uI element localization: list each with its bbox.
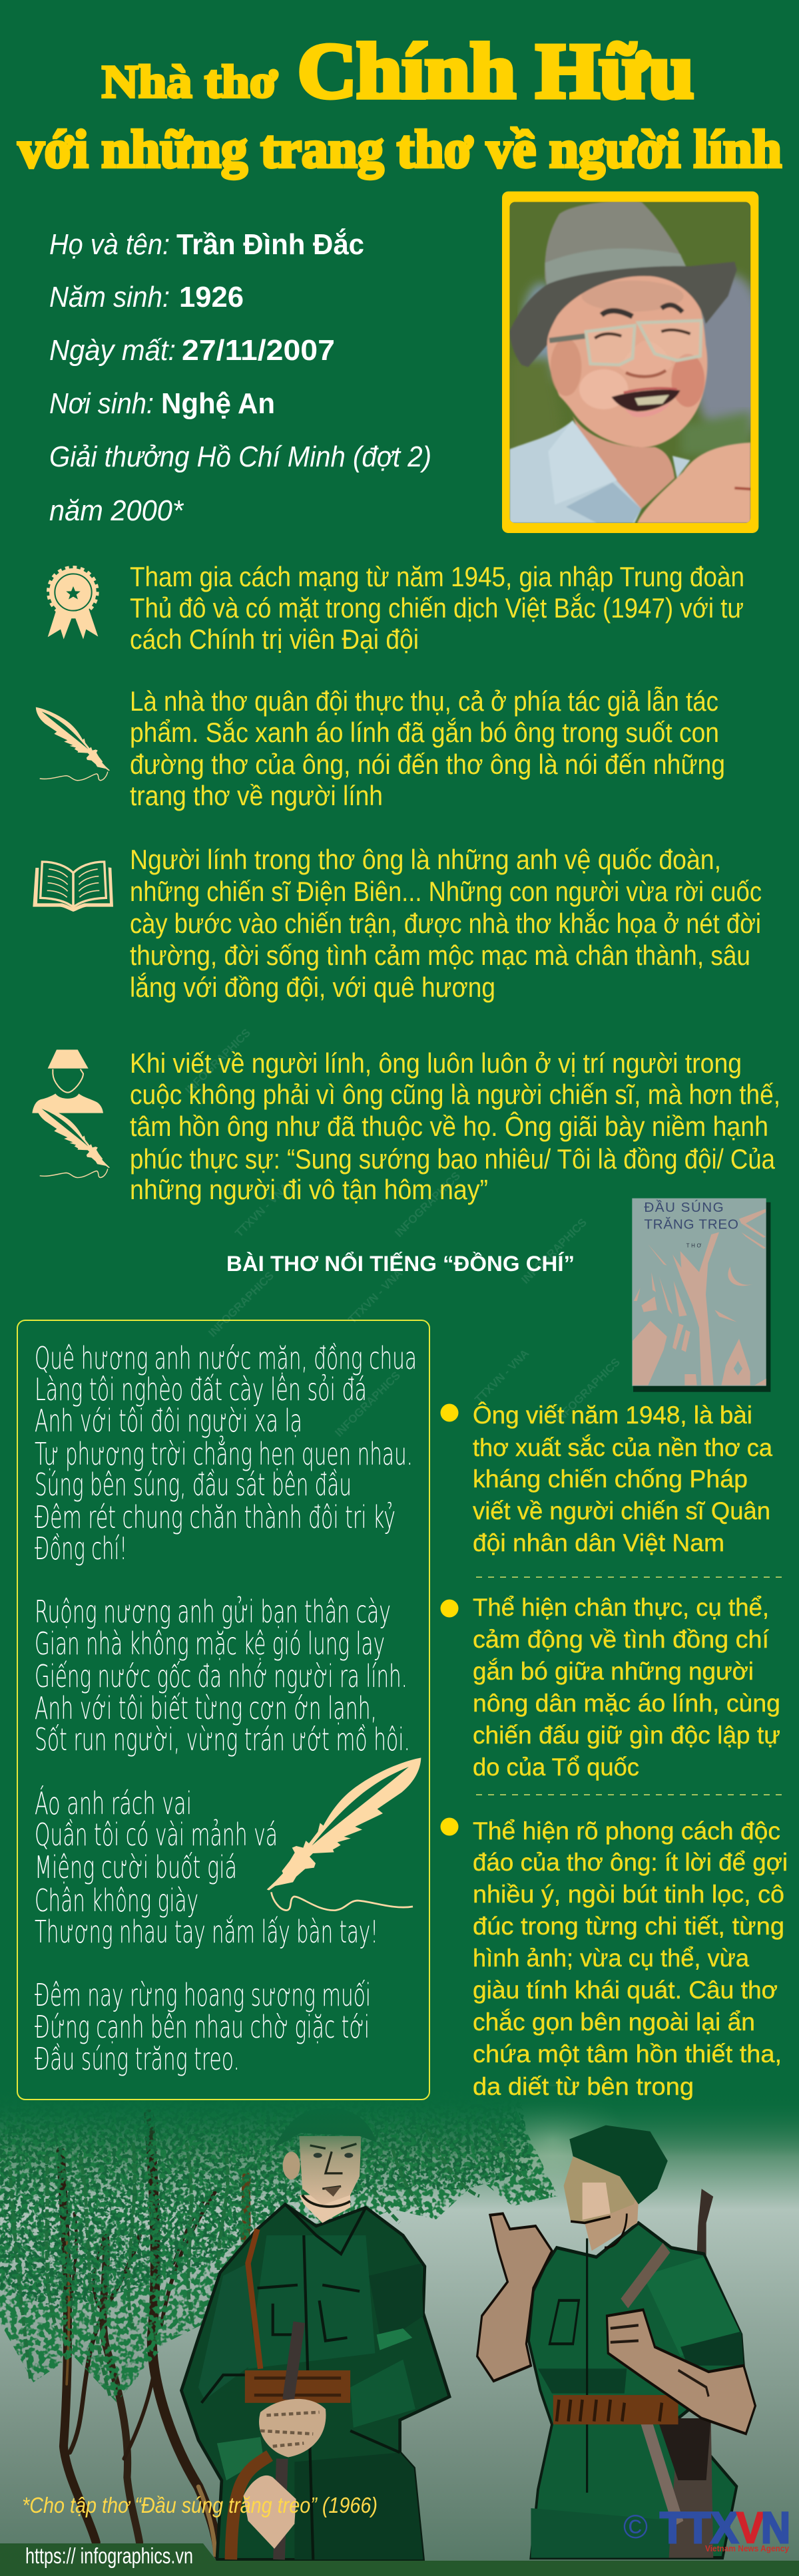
bio block: Trần Đình Đắc — [176, 228, 364, 261]
panel: poem Đồng chí: Sốt run người, vừng trán ướt mồ hôi. — [35, 1722, 410, 1757]
text: army poet: Là nhà thơ quân đội thực thụ, cả ở phía tác giả lẫn tác — [130, 685, 718, 717]
text: military involvement: cách Chính trị viên Đại đội — [130, 624, 419, 655]
icon: open book — [33, 862, 113, 912]
note 1: poem context: viết về người chiến sĩ Quân — [473, 1497, 770, 1525]
note 2: comradeship: chiến đấu giữ gìn độc lập tự — [473, 1722, 780, 1749]
bio block: Giải thưởng Hồ Chí Minh (đợt 2) — [49, 441, 431, 473]
note 1: poem context: đội nhân dân Việt Nam — [473, 1529, 724, 1557]
title — [18, 27, 782, 179]
note 2: comradeship: do của Tổ quốc — [473, 1753, 639, 1781]
note 1: poem context: thơ xuất sắc của nền thơ ca — [473, 1434, 772, 1461]
top fade into page colour — [0, 2086, 799, 2156]
panel: poem Đồng chí: Súng bên súng, đầu sát bên đầu — [35, 1467, 352, 1503]
bio block: Năm sinh: — [49, 281, 170, 313]
panel: poem Đồng chí: Đêm rét chung chăn thành đôi tri kỷ — [35, 1499, 396, 1535]
note 3: poetic style: da diết từ bên trong — [473, 2073, 694, 2100]
bio block: 1926 — [179, 281, 244, 313]
icon: large feather — [267, 1757, 421, 1911]
note 3: poetic style: chắc gọn bên ngoài lại ẩn — [473, 2008, 755, 2036]
portrait photo — [502, 192, 768, 533]
watermark: INFOGRAPHICS — [552, 1356, 623, 1426]
icon: feather — [36, 707, 110, 781]
text: soldiers in his poetry: lắng với đồng đội, với quê hương — [130, 972, 495, 1003]
panel: poem Đồng chí: Ruộng nương anh gửi bạn thân cày — [35, 1594, 391, 1630]
note 1: poem context: Ông viết năm 1948, là bài — [473, 1401, 752, 1429]
text: writing about soldiers: những người đi vô tận hôm nay” — [130, 1174, 488, 1205]
bio block — [49, 228, 431, 527]
logo: TTXVN: © — [623, 2508, 648, 2545]
panel: poem Đồng chí: Anh với tôi biết từng cơn ớn lạnh, — [35, 1690, 377, 1726]
icon: soldier with feather — [32, 1049, 110, 1178]
watermark: INFOGRAPHICS — [392, 1169, 463, 1240]
panel: poem Đồng chí: Tự phương trời chẳng hẹn quen nhau. — [35, 1435, 413, 1472]
panel: poem Đồng chí: Đêm nay rừng hoang sương muối — [35, 1977, 371, 2013]
logo: TTXVN: N — [761, 2503, 790, 2552]
foliage — [0, 2090, 558, 2402]
note 2: comradeship: nông dân mặc áo lính, cùng — [473, 1690, 780, 1717]
note 3: poetic style: Thể hiện rõ phong cách độc — [473, 1817, 780, 1845]
note 2: comradeship: cảm động về tình đồng chí — [473, 1626, 770, 1653]
text: army poet: phẩm. Sắc xanh áo lính đã gắn bó ông trong suốt con — [130, 717, 719, 748]
logo: TTXVN — [623, 2503, 790, 2553]
logo: TTXVN: TTX — [660, 2503, 738, 2552]
note 2: comradeship: Thể hiện chân thực, cụ thể, — [473, 1594, 769, 1621]
note 3: poetic style: giàu tính khái quát. Câu thơ — [473, 1976, 778, 2004]
text: writing about soldiers — [130, 1047, 780, 1205]
tree trunks — [61, 2114, 246, 2555]
panel: poem Đồng chí: Quần tôi có vài mảnh vá — [35, 1817, 278, 1853]
soldier: left — [181, 2108, 449, 2559]
note 3: poetic style: nhiều ý, ngòi bút tinh lọc, cô — [473, 1881, 784, 1908]
logo: TTXVN: V — [736, 2503, 764, 2552]
panel: poem Đồng chí: Đầu súng trăng treo. — [35, 2041, 240, 2077]
illustration: two soldiers under a tree — [0, 2080, 799, 2561]
logo: TTXVN: Vietnam News Agency — [705, 2543, 790, 2553]
panel: poem Đồng chí: Gian nhà không mặc kệ gió lung lay — [35, 1626, 385, 1662]
text: army poet — [130, 685, 725, 811]
text: writing about soldiers: Khi viết về người lính, ông luôn luôn ở vị trí người trong — [130, 1047, 742, 1079]
panel: poem Đồng chí: Đồng chí! — [35, 1531, 127, 1566]
panel: poem Đồng chí — [17, 1320, 429, 2100]
text: soldiers in his poetry: Người lính trong thơ ông là những anh vệ quốc đoàn, — [130, 844, 721, 875]
icon: medal — [48, 568, 98, 640]
book cover: Đầu súng trăng treo: THƠ — [686, 1242, 701, 1248]
watermark: INFOGRAPHICS — [519, 1216, 589, 1286]
panel: poem Đồng chí: Giếng nước gốc đa nhớ người ra lính. — [35, 1658, 407, 1694]
panel: poem Đồng chí: Làng tôi nghèo đất cày lên sỏi đá — [35, 1372, 367, 1407]
footnote: *Cho tập thơ “Đầu súng trăng treo” (1966) — [22, 2493, 378, 2517]
watermark: INFOGRAPHICS — [332, 1369, 403, 1439]
text: soldiers in his poetry — [130, 844, 762, 1003]
watermark: TTXVN - VNA — [346, 1267, 405, 1326]
text: military involvement — [130, 561, 744, 655]
bio block: Nghệ An — [161, 387, 275, 420]
note 3: poetic style: đúc trong từng chi tiết, từng — [473, 1913, 784, 1940]
panel: poem Đồng chí: Miệng cười buốt giá — [35, 1849, 237, 1885]
book cover: Đầu súng trăng treo — [632, 1198, 770, 1392]
bio block: 27/11/2007 — [182, 334, 335, 367]
note 3: poetic style: hình ảnh; vừa cụ thể, vừa — [473, 1944, 749, 1972]
panel: poem Đồng chí: Quê hương anh nước mặn, đồng chua — [35, 1340, 417, 1376]
heading: famous poem: BÀI THƠ NỔI TIẾNG “ĐỒNG CHÍ” — [226, 1252, 575, 1276]
bio block: Họ và tên: — [49, 228, 170, 261]
panel: poem Đồng chí: Thương nhau tay nắm lấy bàn tay! — [35, 1914, 378, 1950]
bio block: Ngày mất: — [49, 334, 176, 367]
book cover: Đầu súng trăng treo: ĐẦU SÚNG — [644, 1200, 724, 1215]
book cover: Đầu súng trăng treo: TRĂNG TREO — [644, 1217, 738, 1232]
note 1: poem context — [441, 1401, 772, 1557]
panel: poem Đồng chí: Anh với tôi đôi người xa lạ — [35, 1403, 302, 1439]
bottom band — [0, 2561, 799, 2576]
note 1: poem context: kháng chiến chống Pháp — [473, 1465, 748, 1493]
note 3: poetic style: chứa một tâm hồn thiết tha, — [473, 2040, 782, 2068]
footer tab with website: https:// infographics.vn — [25, 2543, 193, 2568]
watermark — [182, 1026, 623, 1439]
title: với những trang thơ về người lính — [18, 120, 782, 179]
watermark: INFOGRAPHICS — [182, 1026, 253, 1097]
bio block: năm 2000* — [49, 494, 184, 527]
panel: poem Đồng chí: Đứng cạnh bên nhau chờ giặc tới — [35, 2009, 370, 2045]
text: army poet: trang thơ về người lính — [130, 780, 383, 811]
watermark: INFOGRAPHICS — [206, 1269, 276, 1340]
note 3: poetic style: đáo của thơ ông: ít lời để gợi — [473, 1849, 788, 1876]
note 2: comradeship — [441, 1594, 780, 1781]
bio block: Nơi sinh: — [49, 387, 154, 420]
title: Nhà thơ — [102, 57, 278, 108]
note 2: comradeship: gắn bó giữa những người — [473, 1658, 754, 1685]
text: army poet: đường thơ của ông, nói đến thơ ông là nói đến những — [130, 749, 725, 780]
title: Chính Hữu — [298, 27, 694, 114]
panel: poem Đồng chí: Áo anh rách vai — [35, 1785, 192, 1821]
panel: poem Đồng chí: Chân không giày — [35, 1883, 198, 1919]
footer tab with website — [0, 2543, 216, 2576]
note 3: poetic style — [441, 1817, 788, 2100]
watermark: TTXVN - VNA — [232, 1181, 292, 1240]
watermark: TTXVN - VNA — [472, 1347, 531, 1406]
soldier: right — [477, 2125, 755, 2558]
